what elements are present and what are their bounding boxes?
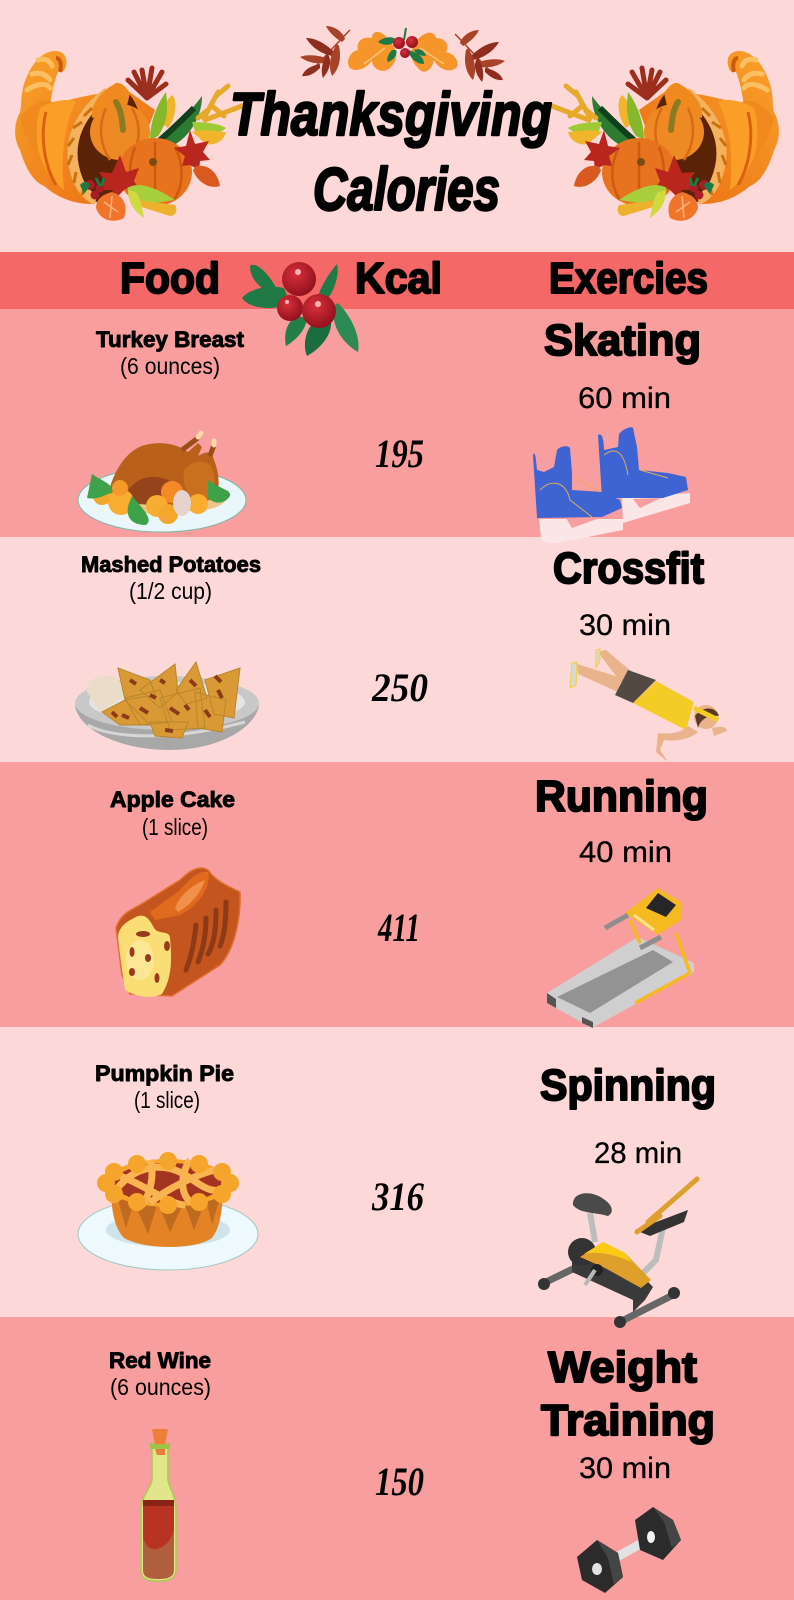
panel: red wine row background <box>0 1317 794 1600</box>
food label: mashed potatoes: Mashed Potatoes <box>81 552 261 577</box>
food label: apple cake: Apple Cake <box>110 787 235 812</box>
exercise name: crossfit: Crossfit <box>553 544 704 593</box>
icon: wine bottle <box>141 1429 176 1581</box>
kcal value: 150: 150 <box>375 1459 424 1504</box>
column headings: Exercies <box>549 254 708 303</box>
food label: mashed potatoes: (1/2 cup) <box>129 578 212 604</box>
food label: apple cake: (1 slice) <box>142 814 208 840</box>
column headings: Food <box>120 254 220 303</box>
food label: turkey breast: Turkey Breast <box>96 327 245 352</box>
exercise name: spinning: Spinning <box>540 1061 716 1110</box>
icon: dumbbell <box>577 1507 681 1593</box>
icon: top leaf and berry ornament <box>300 26 505 82</box>
food label: mashed potatoes <box>81 552 261 604</box>
panel: turkey breast row background <box>0 309 794 537</box>
row: red wine <box>109 1343 715 1593</box>
duration: 30 min: 30 min <box>579 1452 671 1485</box>
duration: 40 min: 40 min <box>579 836 672 869</box>
title: Thanksgiving <box>230 81 552 148</box>
exercise name: skating: Skating <box>544 316 701 365</box>
icon: cranberries with leaves <box>242 262 358 356</box>
row: mashed potatoes <box>75 544 727 762</box>
icon: exercise bike <box>538 1179 697 1328</box>
icon: person doing push-up <box>570 649 727 762</box>
icon: potato wedges on plate <box>75 662 259 750</box>
icon: right cornucopia <box>552 51 779 221</box>
panel: apple cake row background <box>0 762 794 1027</box>
kcal value: 195: 195 <box>375 431 424 476</box>
title <box>230 81 552 223</box>
row: apple cake <box>110 772 708 1028</box>
column headings: Kcal <box>355 254 442 303</box>
food label: red wine: (6 ounces) <box>110 1374 211 1400</box>
panel: pumpkin pie row background <box>0 1027 794 1317</box>
food label: red wine <box>109 1348 211 1400</box>
food label: pumpkin pie: Pumpkin Pie <box>95 1061 234 1086</box>
panel: mashed potatoes row background <box>0 537 794 762</box>
exercise name: weight training: Training <box>541 1396 715 1445</box>
icon: ice skates <box>533 427 690 543</box>
duration: 28 min: 28 min <box>594 1137 682 1170</box>
food label: red wine: Red Wine <box>109 1348 211 1373</box>
title: Calories <box>313 156 500 223</box>
food label: turkey breast <box>96 327 245 379</box>
food label: pumpkin pie: (1 slice) <box>134 1087 200 1113</box>
panel: column header band <box>0 252 794 309</box>
column headings <box>120 254 708 303</box>
food label: turkey breast: (6 ounces) <box>120 353 220 379</box>
duration: 60 min: 60 min <box>578 382 671 415</box>
row: turkey breast <box>78 316 701 543</box>
food label: pumpkin pie <box>95 1061 234 1113</box>
kcal value: 411: 411 <box>377 905 420 950</box>
row: pumpkin pie <box>78 1061 716 1328</box>
kcal value: 250: 250 <box>371 665 428 710</box>
icon: pumpkin pie on plate <box>78 1152 258 1270</box>
food label: apple cake <box>110 787 235 840</box>
icon: treadmill <box>547 888 694 1028</box>
exercise name: running: Running <box>535 772 708 821</box>
exercise name: weight training <box>541 1343 715 1445</box>
duration: 30 min: 30 min <box>579 609 671 642</box>
icon: left cornucopia <box>15 51 242 221</box>
kcal value: 316: 316 <box>371 1174 424 1219</box>
exercise name: weight training: Weight <box>548 1343 697 1392</box>
icon: apple cake slice <box>116 868 240 997</box>
icon: roast turkey on plate <box>78 433 246 532</box>
